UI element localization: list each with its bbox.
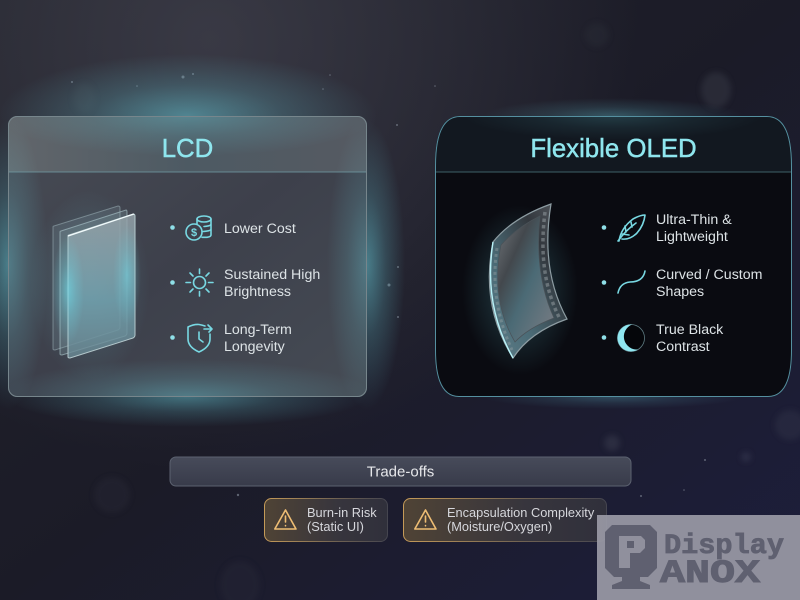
icon: coins: $ [191, 227, 197, 239]
warning: encapsulation complexity: (Moisture/Oxygen) [447, 519, 552, 534]
watermark logo mark [605, 525, 657, 589]
watermark: Display Panox: Display [664, 531, 784, 562]
label: Curved / Custom Shapes: Shapes [656, 284, 704, 300]
warning: burn-in risk: Burn-in Risk [307, 505, 377, 520]
warning: burn-in risk [264, 498, 388, 542]
panel: LCD [8, 116, 367, 397]
trade-offs bar: Trade-offs [367, 464, 434, 480]
bullet: True Black Contrast [602, 322, 724, 355]
bullet list: Flexible OLED [602, 212, 762, 355]
icon: warning triangle [275, 510, 296, 529]
trade-offs bar [170, 457, 631, 486]
heading: Flexible OLED: Flexible OLED [530, 135, 697, 163]
label: Long-Term Longevity: Longevity [224, 339, 286, 355]
bullet: Lower Cost [170, 216, 296, 240]
panel glow: LCD [0, 54, 405, 427]
label: Ultra-Thin & Lightweight: Ultra-Thin & [656, 212, 732, 228]
label: Sustained High Brightness: Sustained High [224, 267, 320, 283]
bullet: Ultra-Thin & Lightweight [602, 212, 732, 245]
panel header: LCD [8, 116, 367, 172]
warning: burn-in risk: (Static UI) [307, 519, 364, 534]
bullet list: LCD [170, 216, 320, 355]
bullet: Curved / Custom Shapes [602, 267, 762, 300]
icon: warning triangle [415, 510, 436, 529]
label: Lower Cost: Lower Cost [224, 221, 296, 237]
icon: curve [618, 271, 645, 293]
icon: shield clock [188, 324, 212, 352]
label: Sustained High Brightness: Brightness [224, 284, 291, 300]
icon: flexible film [462, 204, 578, 375]
heading: LCD: LCD [162, 135, 213, 163]
panel glow: Flexible OLED [483, 98, 743, 409]
watermark: Display Panox [597, 515, 800, 600]
panel header: Flexible OLED [436, 117, 791, 172]
label: True Black Contrast: True Black [656, 322, 724, 338]
icon: crescent moon contrast [617, 324, 644, 352]
warning: encapsulation complexity: Encapsulation Complexity [447, 505, 595, 520]
warning: encapsulation complexity [404, 498, 606, 542]
watermark: Display Panox: ANOX [660, 555, 761, 592]
label: Ultra-Thin & Lightweight: Lightweight [656, 229, 728, 245]
icon: stacked glass layers [30, 190, 150, 380]
label: Curved / Custom Shapes: Curved / Custom [656, 267, 762, 283]
bullet: Sustained High Brightness [170, 267, 320, 300]
bullet: Long-Term Longevity [170, 322, 292, 355]
panel: Flexible OLED [435, 92, 792, 397]
label: True Black Contrast: Contrast [656, 339, 710, 355]
icon: feather [618, 215, 645, 241]
icon: sun [186, 269, 213, 296]
label: Long-Term Longevity: Long-Term [224, 322, 292, 338]
